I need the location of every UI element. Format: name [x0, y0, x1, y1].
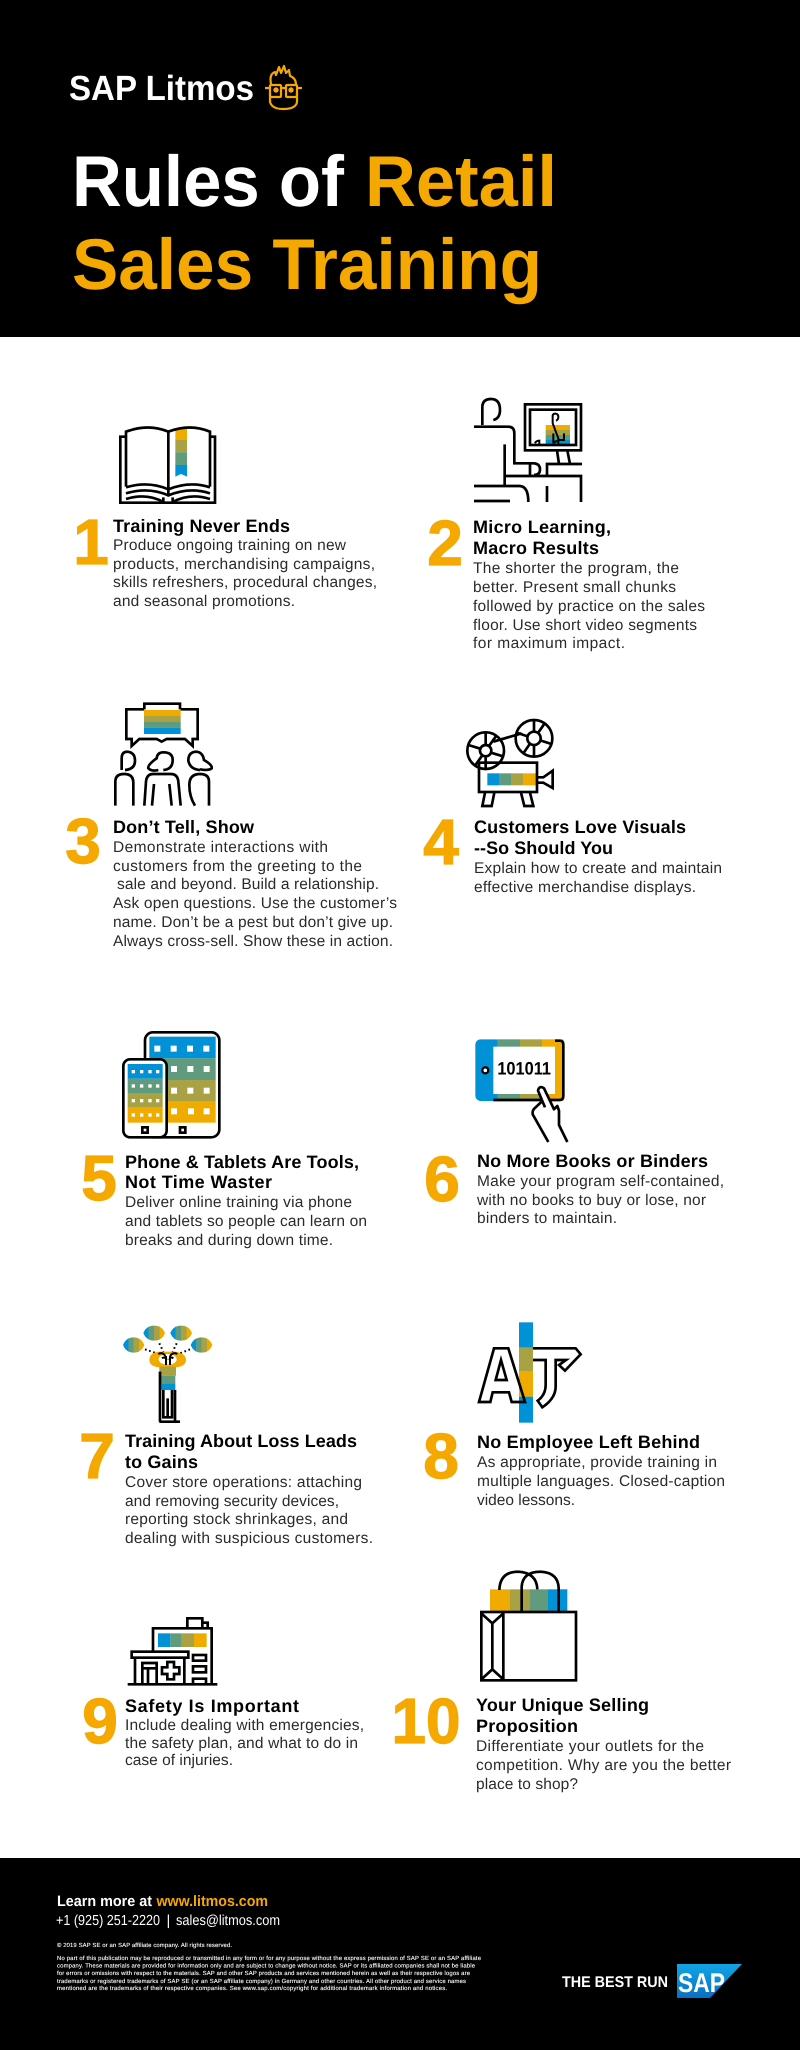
panel: rule 6 — [424, 1039, 724, 1227]
text block: rule 4 body — [474, 860, 722, 896]
footer contact: +1 (925) 251-2220 — [56, 1913, 160, 1929]
icon: tablet with binary and hand: 101011 — [497, 1058, 551, 1078]
heading: Micro Learning, Macro Results — [473, 517, 611, 558]
number 10: 10 — [392, 1685, 460, 1757]
text block: rule 2 body: floor. Use short video segments — [473, 617, 697, 634]
footer contact — [56, 1913, 280, 1929]
text block: rule 9 body: Include dealing with emergencies, — [125, 1717, 364, 1734]
legal text: No part of this publication may be reproduced or transmitted in any form or for any purpose without the express permission of SAP SE or an SAP affiliate — [57, 1955, 482, 1962]
number 6: 6 — [424, 1143, 460, 1215]
text block: rule 3 body — [113, 839, 397, 950]
text block: rule 6 body: binders to maintain. — [477, 1210, 617, 1227]
panel: rule 5 — [81, 1032, 367, 1249]
text block: rule 1 body: Produce ongoing training on new — [113, 537, 347, 554]
icon: three people with speech bubbles — [115, 704, 212, 806]
text block: rule 10 body: place to shop? — [476, 1776, 578, 1793]
heading: Training Never Ends: Training Never Ends — [113, 516, 290, 536]
text block: rule 7 body — [125, 1474, 373, 1547]
footer link: Learn more at — [57, 1893, 152, 1910]
panel: rule 9 — [82, 1618, 364, 1769]
panel: rule 10 — [392, 1572, 731, 1793]
text block: rule 1 body: and seasonal promotions. — [113, 593, 295, 610]
number 9: 9 — [82, 1685, 118, 1757]
text block: rule 3 body: Demonstrate interactions with — [113, 839, 328, 856]
heading: Your Unique Selling Proposition — [476, 1695, 649, 1736]
text block: rule 5 body — [125, 1194, 367, 1249]
panel: rule 7 — [79, 1326, 373, 1547]
heading: Micro Learning, Macro Results: Micro Learning, — [473, 517, 611, 537]
heading: Micro Learning, Macro Results: Macro Results — [473, 538, 599, 558]
legal text: trademarks or registered trademarks of SAP SE (or an SAP affiliate company) in Germany and other countries. All other product and service names — [57, 1978, 466, 1985]
heading: Training About Loss Leads: Training About Loss Leads — [125, 1431, 357, 1451]
text block: rule 5 body: breaks and during down time. — [125, 1232, 333, 1249]
heading: Training About Loss Leads: to Gains — [125, 1452, 198, 1472]
text block: rule 4 body: effective merchandise displays. — [474, 879, 696, 896]
text block: rule 6 body: Make your program self-contained, — [477, 1173, 724, 1190]
icon: multilingual letters — [479, 1322, 581, 1423]
panel: rule 2 — [427, 399, 705, 652]
text block: rule 7 body: reporting stock shrinkages, and — [125, 1511, 348, 1528]
title: Rules of — [72, 142, 345, 222]
panel: rule 4 — [423, 720, 722, 896]
legal text: © 2019 SAP SE or an SAP affiliate company. All rights reserved. — [57, 1942, 232, 1949]
text block: rule 2 body: better. Present small chunks — [473, 579, 676, 596]
heading: Phone & Tablets Are Tools: Not Time Waster — [125, 1172, 272, 1192]
number 8: 8 — [423, 1420, 459, 1492]
legal text — [57, 1942, 482, 1992]
icon: shopping bag — [481, 1572, 576, 1680]
icon: person juggling security ideas — [123, 1326, 212, 1422]
icon: tablet with binary and hand — [475, 1039, 567, 1142]
logo: SAP: SAP — [678, 1968, 725, 1998]
panel: rule 8 — [423, 1322, 725, 1509]
text block: rule 10 body — [476, 1738, 731, 1793]
legal text: company. These materials are provided for information only and are subject to change without notice. SAP or its affiliated companies shall not be liable — [57, 1962, 476, 1970]
header panel — [0, 0, 800, 337]
icon: person at computer — [474, 399, 582, 502]
heading: Don't Tell, Show: Don’t Tell, Show — [113, 817, 255, 837]
text block: rule 10 body: competition. Why are you the better — [476, 1757, 731, 1774]
footer panel — [0, 1858, 800, 2050]
text block: rule 3 body: sale and beyond. Build a relationship. — [117, 876, 379, 893]
heading: Phone & Tablets Are Tools — [125, 1152, 359, 1192]
heading: Your Unique Selling Proposition: Your Unique Selling — [476, 1695, 649, 1715]
number 3: 3 — [65, 805, 101, 877]
text block: rule 5 body: Deliver online training via phone — [125, 1194, 352, 1211]
heading: Customers Love Visuals: Customers Love Visuals — [474, 817, 686, 837]
footer link — [57, 1893, 268, 1910]
text block: rule 9 body: the safety plan, and what to do in — [125, 1735, 358, 1752]
heading: No More Books or Binders: No More Books or Binders — [477, 1151, 708, 1171]
icon: Litmos mascot face — [265, 66, 302, 109]
text block: rule 9 body: case of injuries. — [125, 1752, 233, 1769]
footer contact: | — [166, 1913, 170, 1929]
text block: rule 8 body: As appropriate, provide training in — [477, 1454, 717, 1471]
icon: phone and tablet — [123, 1032, 219, 1137]
text block: rule 5 body: and tablets so people can learn on — [125, 1213, 367, 1230]
text block: rule 2 body: The shorter the program, the — [473, 560, 679, 577]
heading: Your Unique Selling Proposition: Proposition — [476, 1716, 578, 1736]
number 1: 1 — [73, 506, 109, 578]
text block: rule 3 body: Always cross-sell. Show these in action. — [113, 933, 393, 950]
text block: rule 10 body: Differentiate your outlets for the — [476, 1738, 704, 1755]
heading: Customers Love Visuals — [474, 817, 686, 858]
logo: SAP Litmos: SAP Litmos — [69, 69, 254, 108]
text block: rule 1 body: products, merchandising campaigns, — [113, 556, 375, 573]
text block: rule 2 body: followed by practice on the sales — [473, 598, 705, 615]
title — [72, 142, 557, 305]
icon: film projector — [467, 720, 553, 806]
heading: No Employee Left Behind: No Employee Left Behind — [477, 1432, 700, 1452]
number 7: 7 — [79, 1420, 115, 1492]
text block: rule 8 body: video lessons. — [477, 1492, 575, 1509]
text block: rule 2 body — [473, 560, 705, 652]
legal text: for errors or omissions with respect to the materials. SAP and other SAP products and services mentioned herein as well as their respective logos are — [57, 1970, 471, 1977]
text block: rule 1 body: skills refreshers, procedural changes, — [113, 574, 377, 591]
text block: rule 6 body: with no books to buy or lose, nor — [476, 1192, 706, 1209]
text block: rule 6 body — [476, 1173, 724, 1227]
icon: hospital building — [128, 1618, 217, 1684]
text block: rule 7 body: dealing with suspicious customers. — [125, 1530, 373, 1547]
number 5: 5 — [81, 1142, 117, 1214]
heading: Safety Is Important: Safety Is Important — [125, 1696, 299, 1716]
panel: rule 3 — [65, 704, 397, 950]
text block: rule 9 body — [125, 1717, 364, 1769]
text block: rule 3 body: customers from the greeting to the — [113, 858, 362, 875]
footer contact: sales@litmos.com — [176, 1913, 280, 1929]
footer link: www.litmos.com — [156, 1893, 268, 1910]
text block: rule 4 body: Explain how to create and maintain — [474, 860, 722, 877]
heading: Training About Loss Leads — [125, 1431, 357, 1472]
heading: Customers Love Visuals: --So Should You — [474, 838, 613, 858]
number 4: 4 — [423, 806, 459, 878]
text block: rule 1 body — [113, 537, 377, 610]
text block: rule 7 body: Cover store operations: attaching — [125, 1474, 362, 1491]
text block: rule 7 body: and removing security devices, — [125, 1493, 339, 1510]
text block: rule 2 body: for maximum impact. — [473, 635, 625, 652]
title: Sales Training — [72, 225, 542, 305]
icon: open book — [120, 427, 215, 503]
text block: rule 8 body: multiple languages. Closed-caption — [477, 1473, 725, 1490]
heading: Phone & Tablets Are Tools: Phone & Tablets Are Tools, — [125, 1152, 359, 1172]
tagline: The Best Run: THE BEST RUN — [562, 1974, 668, 1991]
title: Retail — [365, 142, 557, 222]
text block: rule 3 body: name. Don’t be a pest but don’t give up. — [113, 914, 393, 931]
text block: rule 8 body — [477, 1454, 725, 1509]
text block: rule 3 body: Ask open questions. Use the customer’s — [113, 895, 397, 912]
panel: rule 1 — [73, 427, 377, 610]
legal text: mentioned are the trademarks of their respective companies. See www.sap.com/copyright for additional trademark information and notices. — [57, 1985, 447, 1992]
number 2: 2 — [427, 507, 463, 579]
